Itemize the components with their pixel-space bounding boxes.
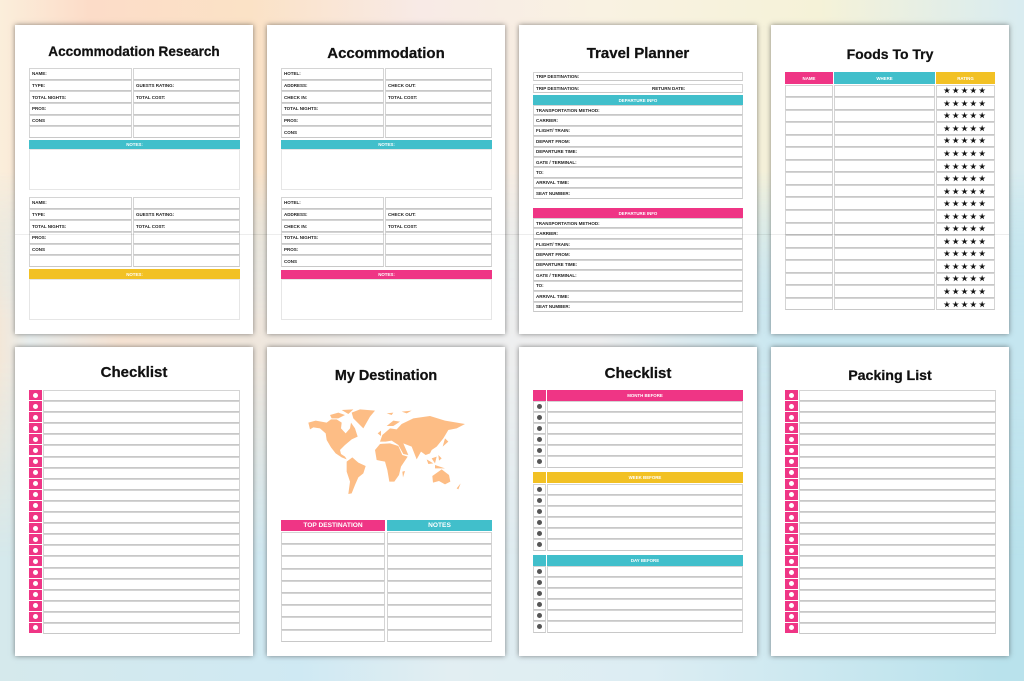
bar corner teal: [533, 555, 546, 566]
form table 1: CONS: [284, 130, 297, 135]
food table with star ratings: ★★★★★: [943, 187, 988, 196]
form table 2: CONS: [284, 259, 297, 264]
title: My Destination: [335, 368, 437, 384]
rows: month before: [533, 401, 743, 468]
form table 1: GUESTS RATING:: [136, 83, 174, 88]
departure fields 2: GATE / TERMINAL:: [536, 273, 577, 278]
form table 1: TYPE:: [32, 83, 45, 88]
food table with star ratings: ★★★★★: [943, 111, 988, 120]
form table 1: TOTAL NIGHTS:: [32, 95, 66, 100]
food table with star ratings: ★★★★★: [943, 262, 988, 271]
bar corner yellow: [533, 472, 546, 483]
notes box 2: [29, 279, 240, 320]
departure fields 2: TO:: [536, 283, 544, 288]
form table 2: TYPE:: [32, 212, 45, 217]
notes bar yellow: NOTES:: [126, 272, 143, 276]
header: rating: [936, 72, 995, 84]
page: foods to try: [771, 25, 1009, 334]
notes bar teal: [29, 140, 240, 150]
departure fields 1: TRANSPORTATION METHOD:: [536, 108, 600, 113]
food table with star ratings: ★★★★★: [943, 99, 988, 108]
form table 2: TOTAL COST:: [388, 224, 417, 229]
title: Foods To Try: [847, 46, 933, 62]
page: packing list: [771, 347, 1009, 656]
page: travel planner: [519, 25, 757, 334]
departure fields 2: TRANSPORTATION METHOD:: [536, 221, 600, 226]
form table 1: CHECK OUT:: [388, 83, 416, 88]
departure fields 1: ARRIVAL TIME:: [536, 180, 569, 185]
bar: day before: [547, 555, 743, 566]
header: where: WHERE: [876, 76, 893, 80]
form table 1: HOTEL:: [284, 71, 301, 76]
trip fields: TRIP DESTINATION:: [536, 74, 579, 79]
form table 1: ADDRESS:: [284, 83, 308, 88]
food table with star ratings: ★★★★★: [943, 287, 988, 296]
form table 1: TOTAL COST:: [388, 95, 417, 100]
bar: month before: MONTH BEFORE: [627, 393, 663, 398]
notes bar pink: NOTES:: [378, 272, 395, 277]
departure fields 1: SEAT NUMBER:: [536, 191, 570, 196]
title: Travel Planner: [587, 45, 689, 62]
form table 2: [281, 197, 492, 267]
food table with star ratings: ★★★★★: [943, 86, 988, 95]
form table 2: TOTAL NIGHTS:: [32, 224, 66, 229]
form table 2: NAME:: [32, 200, 47, 205]
title: Checklist: [605, 365, 671, 382]
departure fields 1: TO:: [536, 170, 544, 175]
departure fields 1: DEPARTURE TIME:: [536, 149, 577, 154]
departure bar teal: DEPARTURE INFO: [619, 98, 657, 102]
food table with star ratings: ★★★★★: [943, 237, 988, 246]
form table 1: [29, 68, 240, 138]
departure fields 2: [533, 218, 743, 312]
food table with star ratings: ★★★★★: [943, 162, 988, 171]
destination table: [281, 532, 492, 642]
form table 2: CHECK IN:: [284, 224, 307, 229]
header: notes: [387, 520, 492, 531]
trip fields: RETURN DATE:: [652, 86, 685, 91]
title: Accommodation: [327, 45, 445, 62]
packing rows: [785, 390, 996, 634]
form table 1: CHECK IN:: [284, 95, 307, 100]
food table with star ratings: ★★★★★: [943, 149, 988, 158]
notes bar pink: [281, 270, 492, 279]
header: notes: NOTES: [428, 522, 451, 529]
header: rating: RATING: [957, 76, 974, 80]
trip fields: TRIP DESTINATION:: [536, 86, 579, 91]
food table with star ratings: ★★★★★: [943, 212, 988, 221]
form table 1: CONS: [32, 118, 45, 123]
bar corner pink: [533, 390, 546, 400]
bar: week before: WEEK BEFORE: [629, 475, 661, 480]
page: accommodation: [267, 25, 505, 334]
departure fields 2: SEAT NUMBER:: [536, 304, 570, 309]
departure fields 2: DEPARTURE TIME:: [536, 262, 577, 267]
food table with star ratings: ★★★★★: [943, 136, 988, 145]
food table with star ratings: ★★★★★: [943, 274, 988, 283]
rows: day before: [533, 566, 743, 633]
bar: month before: [547, 390, 743, 400]
form table 1: PROS:: [284, 118, 298, 123]
title: Checklist: [101, 364, 167, 381]
form table 2: CONS: [32, 247, 45, 252]
trip fields: [533, 72, 743, 93]
rows: week before: [533, 484, 743, 551]
checklist rows: [29, 390, 240, 634]
departure fields 1: GATE / TERMINAL:: [536, 160, 577, 165]
form table 2: TOTAL NIGHTS:: [284, 235, 318, 240]
departure fields 2: ARRIVAL TIME:: [536, 294, 569, 299]
food table with star ratings: ★★★★★: [943, 174, 988, 183]
food table with star ratings: [785, 85, 995, 310]
form table 2: [29, 197, 240, 267]
form table 1: NAME:: [32, 71, 47, 76]
bar: day before: DAY BEFORE: [631, 558, 659, 563]
form table 1: [281, 68, 492, 138]
notes bar teal: NOTES:: [378, 142, 395, 147]
departure bar teal: [533, 95, 743, 105]
form table 2: CHECK OUT:: [388, 212, 416, 217]
form table 2: GUESTS RATING:: [136, 212, 174, 217]
departure bar pink: [533, 208, 743, 218]
header: name: NAME: [803, 76, 815, 80]
food table with star ratings: ★★★★★: [943, 224, 988, 233]
bar: week before: [547, 472, 743, 483]
form table 2: TOTAL COST:: [136, 224, 165, 229]
notes bar teal: NOTES:: [126, 142, 143, 147]
food table with star ratings: ★★★★★: [943, 249, 988, 258]
food table with star ratings: ★★★★★: [943, 300, 988, 309]
notes bar teal: [281, 140, 492, 150]
header: top destination: TOP DESTINATION: [303, 522, 363, 529]
form table 2: HOTEL:: [284, 200, 301, 205]
departure bar pink: DEPARTURE INFO: [619, 210, 657, 216]
world map: [308, 409, 465, 494]
form table 2: PROS:: [32, 235, 46, 240]
departure fields 2: CARRIER:: [536, 231, 558, 236]
form table 1: TOTAL COST:: [136, 95, 165, 100]
departure fields 1: CARRIER:: [536, 118, 558, 123]
notes box 1: [281, 149, 492, 190]
departure fields 2: DEPART FROM:: [536, 252, 570, 257]
notes box 1: [29, 149, 240, 190]
notes bar yellow: [29, 269, 240, 279]
notes box 2: [281, 279, 492, 320]
title: Accommodation Research: [48, 44, 220, 59]
page: accommodation research: [15, 25, 253, 334]
header: name: [785, 72, 833, 84]
food table with star ratings: ★★★★★: [943, 199, 988, 208]
departure fields 2: FLIGHT/ TRAIN:: [536, 242, 570, 247]
form table 1: PROS:: [32, 106, 46, 111]
header: where: [834, 72, 935, 84]
page: my destination: [267, 347, 505, 656]
departure fields 1: DEPART FROM:: [536, 139, 570, 144]
page: checklist by time: [519, 347, 757, 656]
title: Packing List: [848, 368, 932, 384]
form table 2: ADDRESS:: [284, 212, 308, 217]
form table 2: PROS:: [284, 247, 298, 252]
departure fields 1: [533, 105, 743, 199]
form table 1: TOTAL NIGHTS:: [284, 106, 318, 111]
departure fields 1: FLIGHT/ TRAIN:: [536, 128, 570, 133]
page: checklist pink: [15, 347, 253, 656]
header: top destination: [281, 520, 385, 531]
food table with star ratings: ★★★★★: [943, 124, 988, 133]
